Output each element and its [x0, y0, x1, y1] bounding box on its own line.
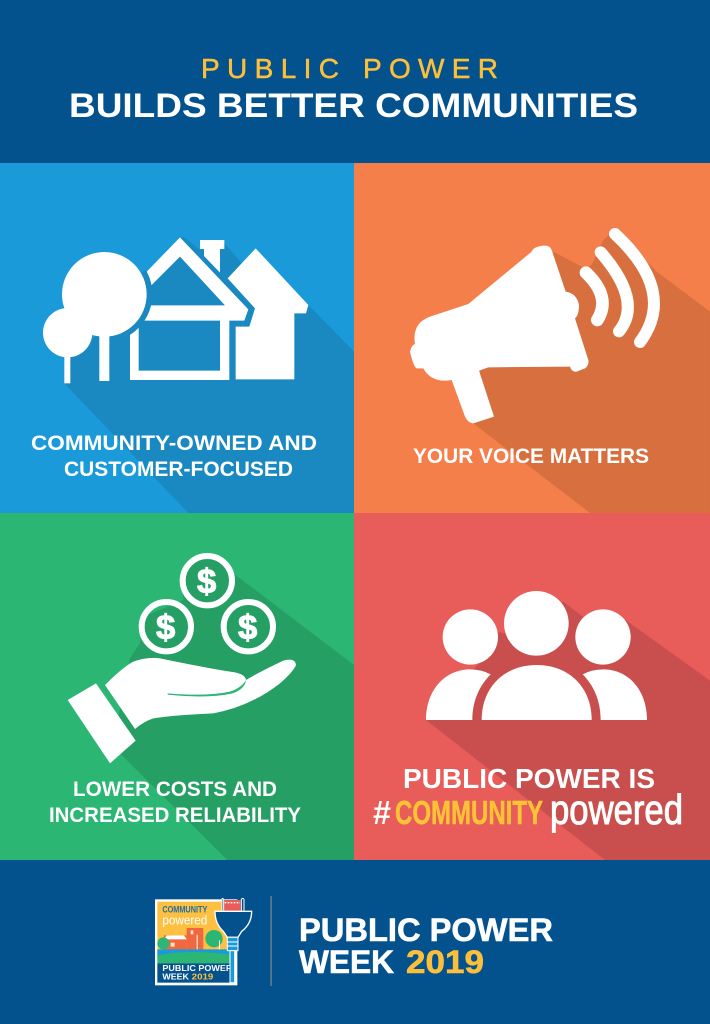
title: public power: PUBLIC	[201, 53, 339, 84]
icon: group of people	[426, 591, 710, 860]
label: hashtag community powered	[373, 786, 683, 833]
label: hashtag community powered: #	[373, 794, 391, 831]
label: lower costs: INCREASED RELIABILITY	[49, 803, 301, 827]
panel: community-owned	[0, 163, 354, 513]
footer title: PUBLIC POWER	[299, 912, 553, 948]
label: hashtag community powered: powered	[550, 786, 683, 833]
icon: hand with coins	[68, 553, 354, 860]
panel: lower costs	[0, 513, 354, 860]
logo: public power week 2019: 2019	[192, 973, 214, 982]
icon: hand with coins: $	[197, 563, 216, 601]
icon: hand with coins: $	[238, 609, 257, 647]
logo: public power week 2019: powered	[162, 914, 207, 928]
logo: public power week 2019	[155, 898, 252, 985]
label: lower costs: LOWER COSTS AND	[73, 777, 277, 801]
title: builds better communities: BUILDS BETTER COMMUNITIES	[69, 87, 638, 125]
logo: public power week 2019: PUBLIC POWER	[162, 964, 233, 973]
footer title: WEEK	[299, 944, 394, 980]
label: community-owned: CUSTOMER-FOCUSED	[64, 457, 293, 481]
label: public power is: PUBLIC POWER IS	[403, 763, 655, 794]
label: community-owned: COMMUNITY-OWNED AND	[31, 431, 317, 455]
logo: public power week 2019: WEEK	[162, 973, 189, 982]
footer title	[299, 912, 553, 980]
logo: public power week 2019: COMMUNITY	[162, 905, 208, 915]
header	[0, 0, 710, 163]
panel: your voice matters	[354, 163, 710, 513]
icon: houses and trees	[43, 237, 354, 513]
footer title: 2019	[406, 944, 484, 980]
panel: community powered	[354, 513, 710, 860]
footer	[0, 860, 710, 1024]
label: community-owned	[31, 431, 317, 481]
icon: hand with coins: $	[156, 609, 175, 647]
title: public power	[201, 53, 498, 84]
label: lower costs	[49, 777, 301, 827]
label: your voice matters: YOUR VOICE MATTERS	[413, 444, 649, 468]
title: public power: POWER	[363, 53, 498, 84]
icon: megaphone	[410, 230, 710, 513]
label: hashtag community powered: COMMUNITY	[395, 794, 543, 831]
